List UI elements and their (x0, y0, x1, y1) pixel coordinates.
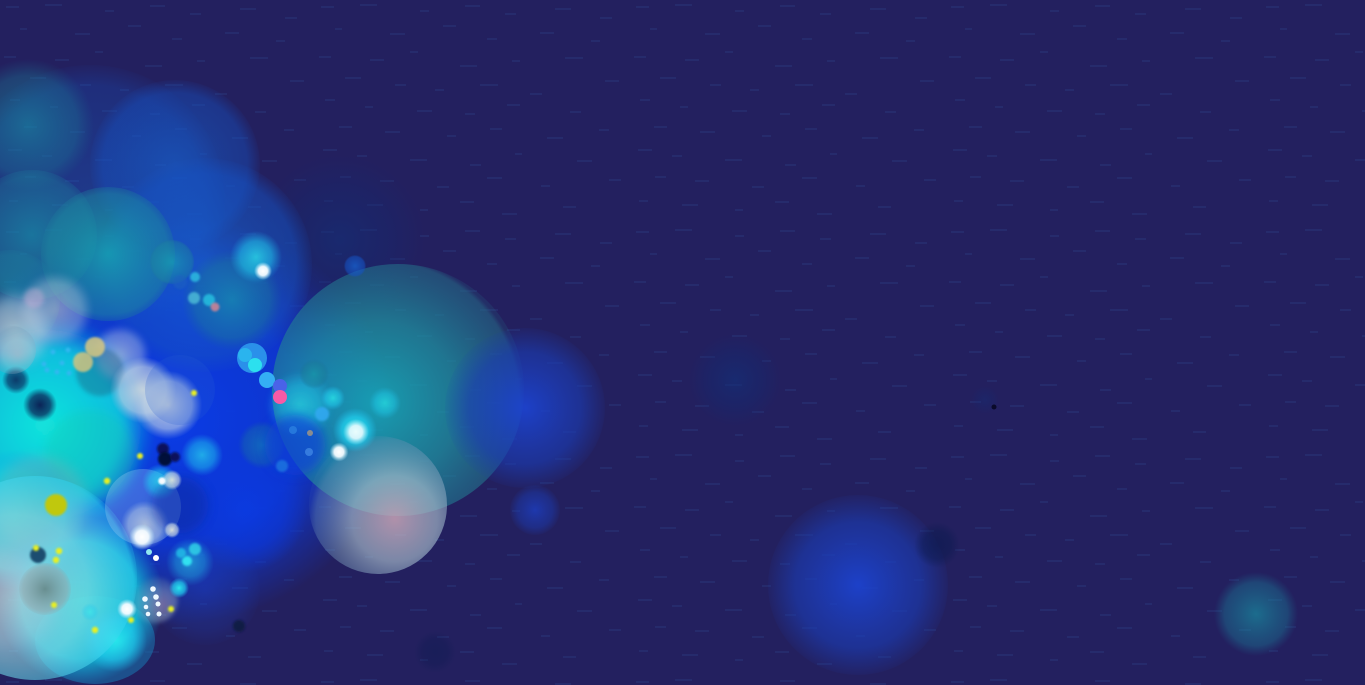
central glowing spheres (238, 359, 401, 475)
centre-left spheres (105, 434, 223, 623)
bright bubble chain (173, 262, 287, 404)
tan and small sparkle dots (42, 337, 105, 376)
upper left translucent discs (0, 59, 312, 372)
large blue glow (0, 65, 425, 684)
pale lower centre disc (309, 436, 447, 574)
yellow dots (33, 390, 197, 633)
left cyan cluster (0, 315, 164, 684)
left pale highlights (0, 272, 215, 439)
right side discs (414, 334, 1298, 675)
white sparkles (81, 470, 201, 621)
dark spots (157, 443, 245, 632)
large central teal disc (150, 255, 605, 645)
